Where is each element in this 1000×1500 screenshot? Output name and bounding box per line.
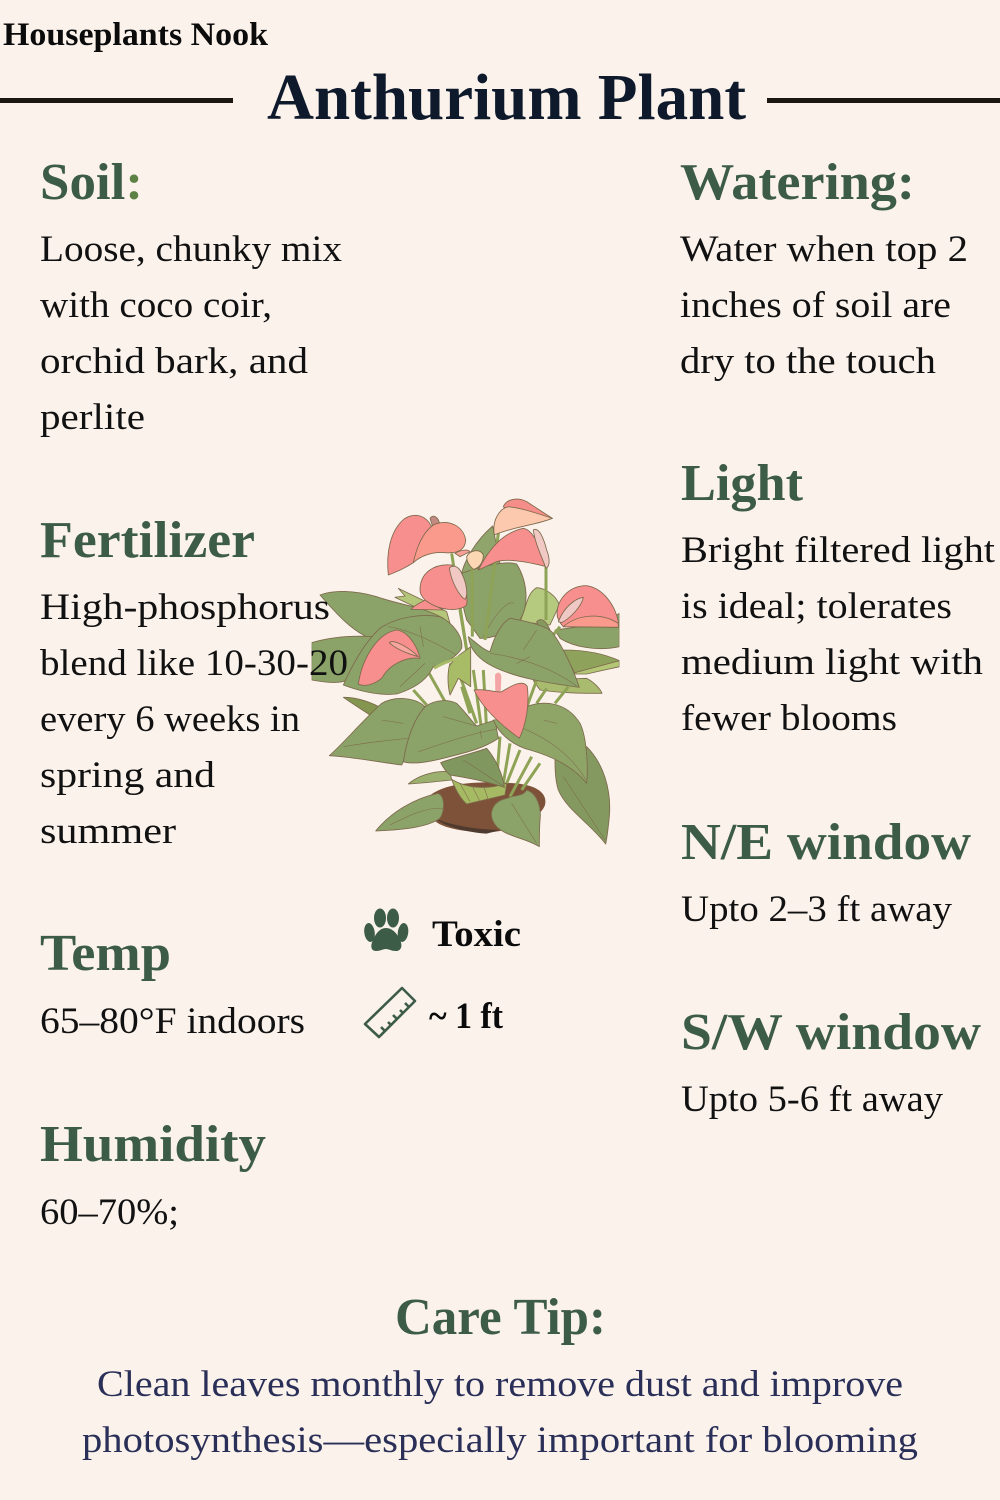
panel: watering: inches of soil are: [680, 285, 951, 326]
panel: watering: Watering:: [680, 154, 915, 211]
panel: temperature: [40, 925, 305, 1042]
panel: soil: with coco coir,: [40, 285, 272, 326]
panel: north and east window: Upto 2–3 ft away: [681, 889, 953, 930]
panel: soil: Soil:: [40, 154, 143, 211]
panel: temperature: 65–80°F indoors: [40, 1001, 305, 1042]
panel: fertilizer: High-phosphorus: [40, 587, 330, 628]
upper left leaf: [320, 591, 443, 638]
panel: watering: [680, 154, 968, 382]
flowers: [430, 516, 440, 526]
middle left leaf: [343, 615, 462, 694]
panel: soil: orchid bark, and: [40, 341, 309, 382]
care tip: [82, 1289, 918, 1461]
panel: soil: perlite: [40, 397, 145, 438]
panel: north and east window: N/E window: [681, 814, 971, 871]
title with side rules: [0, 61, 1000, 134]
panel: light: [681, 455, 996, 739]
panel: fertilizer: spring and: [40, 755, 216, 796]
lower middle leaf: [403, 701, 498, 763]
panel: fertilizer: Fertilizer: [40, 512, 255, 569]
small low leaf: [408, 771, 452, 784]
panel: light: Light: [681, 455, 804, 512]
centre right leaf: [468, 618, 579, 687]
toxic label: Toxic: [432, 914, 521, 955]
care tip: Clean leaves monthly to remove dust and improve: [97, 1364, 903, 1405]
far right leaf: [555, 747, 610, 844]
lower right leaf: [493, 703, 587, 783]
right leaf: [555, 613, 619, 649]
icon: paw print: [363, 908, 409, 951]
brand name: Houseplants Nook: [3, 17, 269, 53]
panel: light: is ideal; tolerates: [681, 586, 952, 627]
panel: light: fewer blooms: [681, 698, 897, 739]
panel: humidity: [40, 1116, 266, 1233]
panel: south and west window: S/W window: [681, 1004, 981, 1061]
panel: fertilizer: summer: [40, 811, 176, 852]
panel: humidity: 60–70%;: [40, 1192, 179, 1233]
panel: soil: [40, 154, 343, 438]
front low leaves: [376, 793, 444, 831]
panel: fertilizer: [40, 512, 348, 852]
title with side rules: Anthurium Plant: [267, 61, 746, 134]
panel: fertilizer: blend like 10-30-20: [40, 643, 348, 684]
panel: south and west window: Upto 5-6 ft away: [681, 1079, 944, 1120]
base of stems: [452, 779, 507, 804]
panel: light: Bright filtered light: [681, 530, 996, 571]
illustration: anthurium plant: [312, 499, 619, 847]
panel: south and west window: [681, 1004, 981, 1120]
back leaves: [395, 588, 450, 623]
panel: watering: Water when top 2: [680, 229, 968, 270]
panel: humidity: Humidity: [40, 1116, 266, 1173]
care tip: photosynthesis—especially important for blooming: [82, 1420, 918, 1461]
panel: fertilizer: every 6 weeks in: [40, 699, 300, 740]
lower left leaf: [329, 699, 425, 765]
tall centre leaf: [461, 563, 526, 638]
panel: north and east window: [681, 814, 971, 930]
panel: watering: dry to the touch: [680, 341, 937, 382]
icon: ruler: [365, 988, 415, 1037]
panel: temperature: Temp: [40, 925, 171, 982]
soil: [427, 782, 545, 834]
height label: ~ 1 ft: [429, 996, 504, 1037]
panel: soil: Loose, chunky mix: [40, 229, 343, 270]
stems: [413, 533, 568, 797]
care tip: Care Tip:: [395, 1289, 606, 1346]
panel: light: medium light with: [681, 642, 984, 683]
